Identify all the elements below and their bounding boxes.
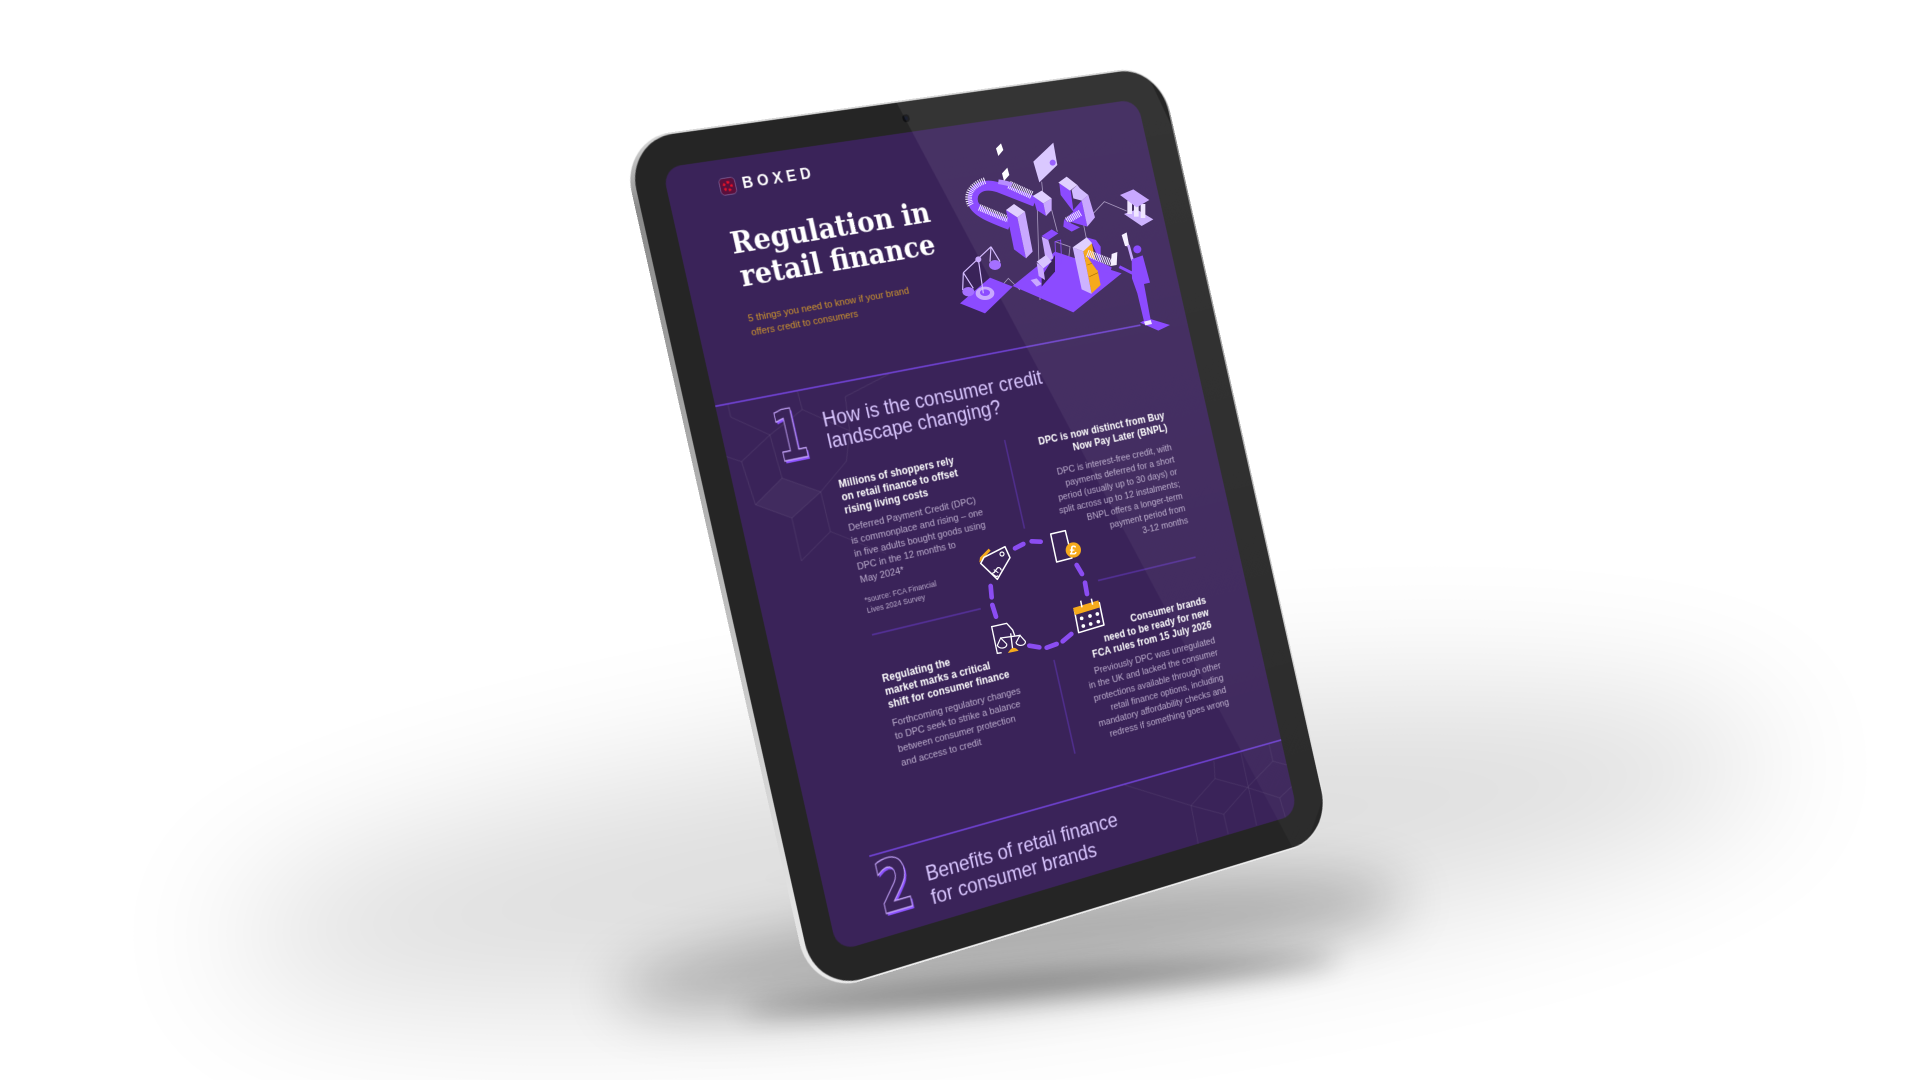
icon: calendar bbox=[1073, 599, 1104, 633]
heading: on retail finance to offset bbox=[840, 467, 959, 503]
icon: phone with pound coin: £ bbox=[1070, 544, 1077, 558]
body bbox=[1088, 635, 1230, 740]
heading bbox=[1091, 594, 1213, 660]
divider bbox=[715, 324, 1141, 407]
body: BNPL offers a longer-term bbox=[1086, 490, 1184, 523]
mat bbox=[1140, 318, 1170, 331]
subtitle: offers credit to consumers bbox=[750, 308, 859, 338]
body bbox=[1056, 442, 1189, 536]
body: protections available through other bbox=[1093, 660, 1222, 704]
tall block bbox=[1006, 204, 1033, 258]
number 1: 1 bbox=[765, 392, 815, 479]
body: split across up to 12 instalments; bbox=[1058, 478, 1181, 516]
body: payments deferred for a short bbox=[1064, 454, 1175, 488]
body: period (usually up to 30 days) or bbox=[1057, 466, 1178, 503]
section 1 heading: landscape changing? bbox=[825, 397, 1003, 454]
heading: Now Pay Later (BNPL) bbox=[1072, 422, 1168, 453]
hexagon pattern bbox=[726, 374, 1292, 844]
body: and access to credit bbox=[900, 736, 982, 769]
centre stair bbox=[1031, 229, 1062, 287]
source note: Lives 2024 Survey bbox=[866, 593, 926, 615]
tablet bbox=[630, 70, 1324, 984]
paper pieces bbox=[996, 143, 1009, 181]
cross dividers bbox=[872, 440, 1196, 754]
person bbox=[1119, 232, 1152, 325]
connector lines bbox=[1003, 182, 1127, 300]
heading: FCA rules from 15 July 2026 bbox=[1091, 619, 1213, 660]
scales bbox=[962, 247, 1001, 300]
certificate bbox=[1033, 143, 1057, 182]
section 1 heading: How is the consumer credit bbox=[820, 367, 1044, 432]
body: DPC in the 12 months to bbox=[856, 539, 957, 573]
floor main bbox=[1013, 252, 1122, 312]
body: between consumer protection bbox=[897, 713, 1017, 755]
block: regulating the market bbox=[881, 656, 1022, 769]
body: retail finance options, including bbox=[1110, 672, 1224, 713]
subtitle: 5 things you need to know if your brand bbox=[747, 285, 910, 324]
source note: *source: FCA Financial bbox=[864, 579, 937, 604]
heading: market marks a critical bbox=[884, 659, 992, 698]
heading bbox=[837, 454, 959, 516]
body bbox=[847, 495, 987, 586]
body: mandatory affordability checks and bbox=[1098, 684, 1227, 729]
body bbox=[891, 684, 1022, 769]
column with orange door bbox=[1073, 237, 1101, 294]
icon: document with scales bbox=[992, 623, 1025, 653]
block: consumer brands bbox=[1088, 594, 1230, 740]
heading: Consumer brands bbox=[1129, 594, 1207, 625]
number 2: 2 bbox=[868, 840, 921, 932]
heading: rising living costs bbox=[843, 486, 929, 516]
heading: DPC is now distinct from Buy bbox=[1037, 409, 1166, 447]
body: to DPC seek to strike a balance bbox=[894, 698, 1022, 742]
section 2 heading: for consumer brands bbox=[929, 839, 1099, 909]
illustration: regulation isometric scene bbox=[960, 142, 1170, 331]
stepped block bbox=[1058, 177, 1095, 232]
title: retail finance bbox=[737, 228, 938, 294]
camera bbox=[902, 114, 910, 123]
floor small bbox=[960, 278, 1013, 313]
title bbox=[727, 195, 938, 294]
heading: shift for consumer finance bbox=[887, 668, 1011, 711]
block: DPC distinct from BNPL bbox=[1037, 409, 1189, 536]
body: Deferred Payment Credit (DPC) bbox=[847, 495, 977, 534]
title: Regulation in bbox=[727, 195, 933, 261]
body: Forthcoming regulatory changes bbox=[891, 684, 1021, 729]
body: in the UK and lacked the consumer bbox=[1088, 647, 1219, 691]
body: 3-12 months bbox=[1141, 514, 1189, 536]
heading: Regulating the bbox=[881, 656, 951, 685]
logo icon bbox=[718, 176, 738, 196]
body: redress if something goes wrong bbox=[1109, 697, 1230, 740]
conveyor to person bbox=[1086, 252, 1117, 273]
section 2 heading: Benefits of retail finance bbox=[924, 809, 1120, 886]
body: May 2024* bbox=[859, 565, 905, 586]
divider 2 bbox=[869, 739, 1281, 857]
icon: price tag: £ bbox=[988, 564, 1004, 581]
ring of icons bbox=[979, 530, 1105, 654]
heading: Millions of shoppers rely bbox=[837, 454, 955, 490]
icon: price tag bbox=[979, 547, 1010, 581]
body: DPC is interest-free credit, with bbox=[1056, 442, 1173, 477]
body: payment period from bbox=[1108, 502, 1186, 530]
screen glare bbox=[897, 72, 1292, 690]
body: is commonplace and rising – one bbox=[850, 507, 984, 547]
body: Previously DPC was unregulated bbox=[1093, 635, 1216, 677]
dashed ring bbox=[991, 541, 1087, 648]
icon: phone with pound coin bbox=[1051, 531, 1081, 562]
block: millions of shoppers bbox=[837, 454, 987, 615]
body: in five adults bought goods using bbox=[853, 519, 987, 560]
cube bbox=[1033, 191, 1052, 216]
conveyor loop bbox=[969, 181, 1035, 225]
bank bbox=[1120, 189, 1153, 226]
logo text: BOXED bbox=[740, 164, 817, 192]
screen bbox=[662, 99, 1298, 952]
heading: need to be ready for new bbox=[1103, 606, 1210, 644]
